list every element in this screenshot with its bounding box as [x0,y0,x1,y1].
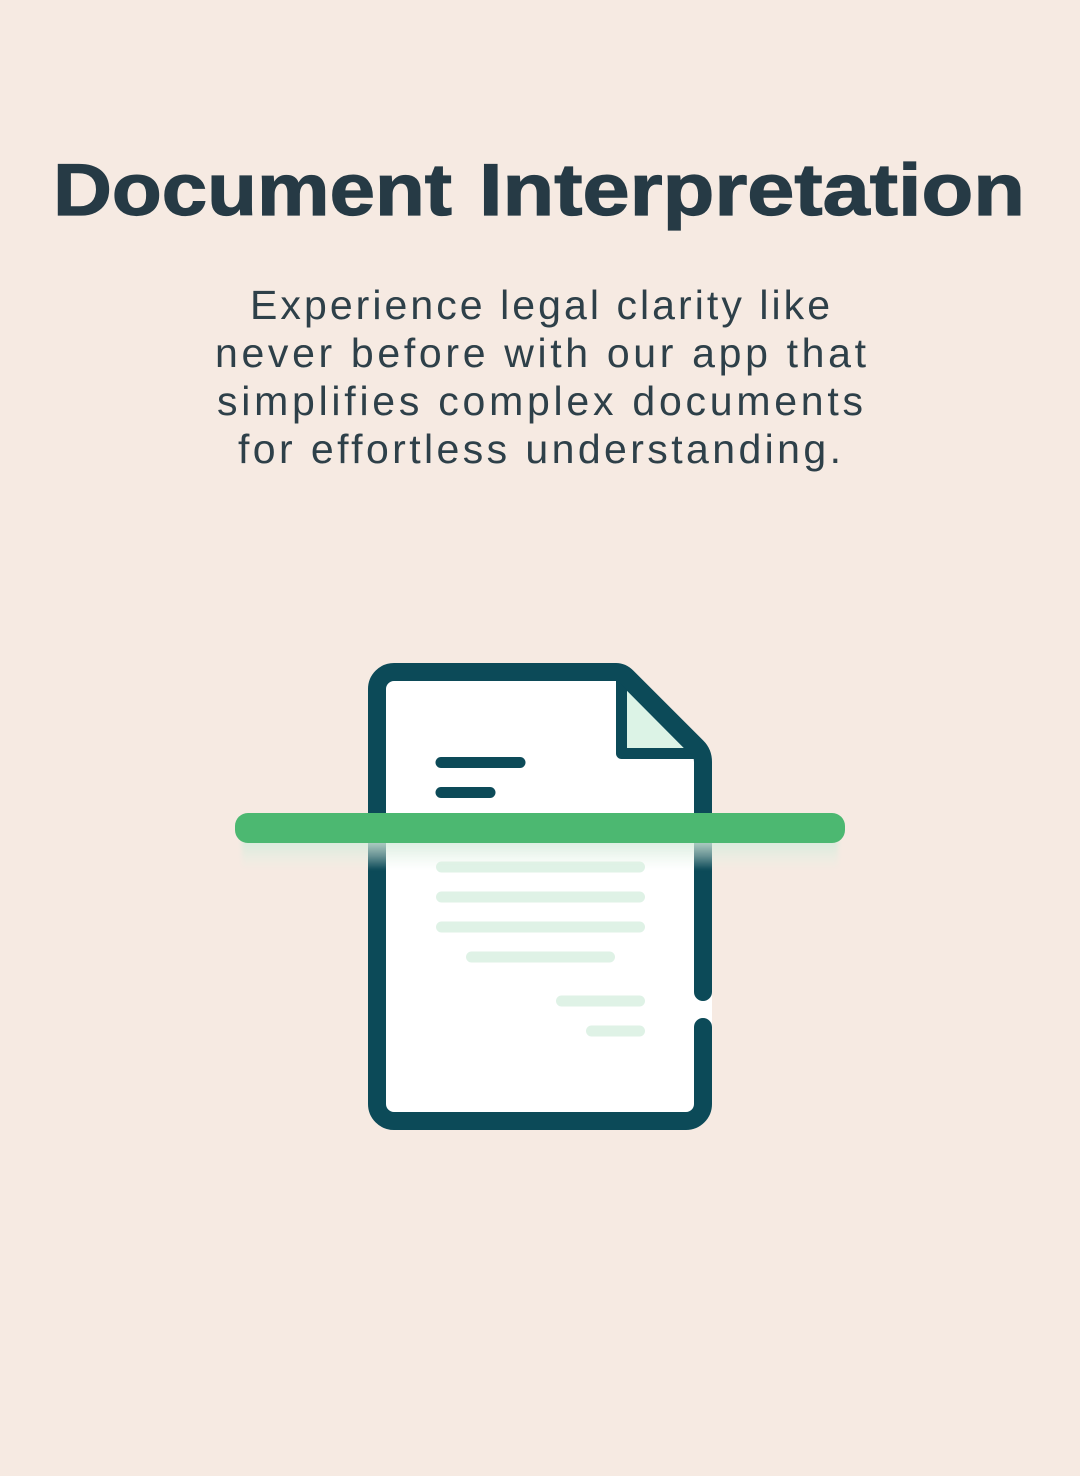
document outline [377,672,703,1121]
document page [377,672,703,1121]
title: Document [53,150,452,231]
folded corner [622,678,697,754]
text block: description: for effortless understanding. [238,426,841,472]
title [53,150,1025,231]
scanner glow [242,841,838,870]
scanner bar [235,813,845,843]
scanned heading lines [436,757,526,798]
gap in outline [694,985,712,1035]
text block: description: Experience legal clarity like [250,282,830,328]
unscanned text lines [436,862,645,1036]
text block: description [215,282,867,472]
text block: description: simplifies complex documents [217,378,863,424]
text block: description: never before with our app that [215,330,867,376]
title: Interpretation [479,150,1025,231]
icon: document being scanned [235,672,845,1121]
